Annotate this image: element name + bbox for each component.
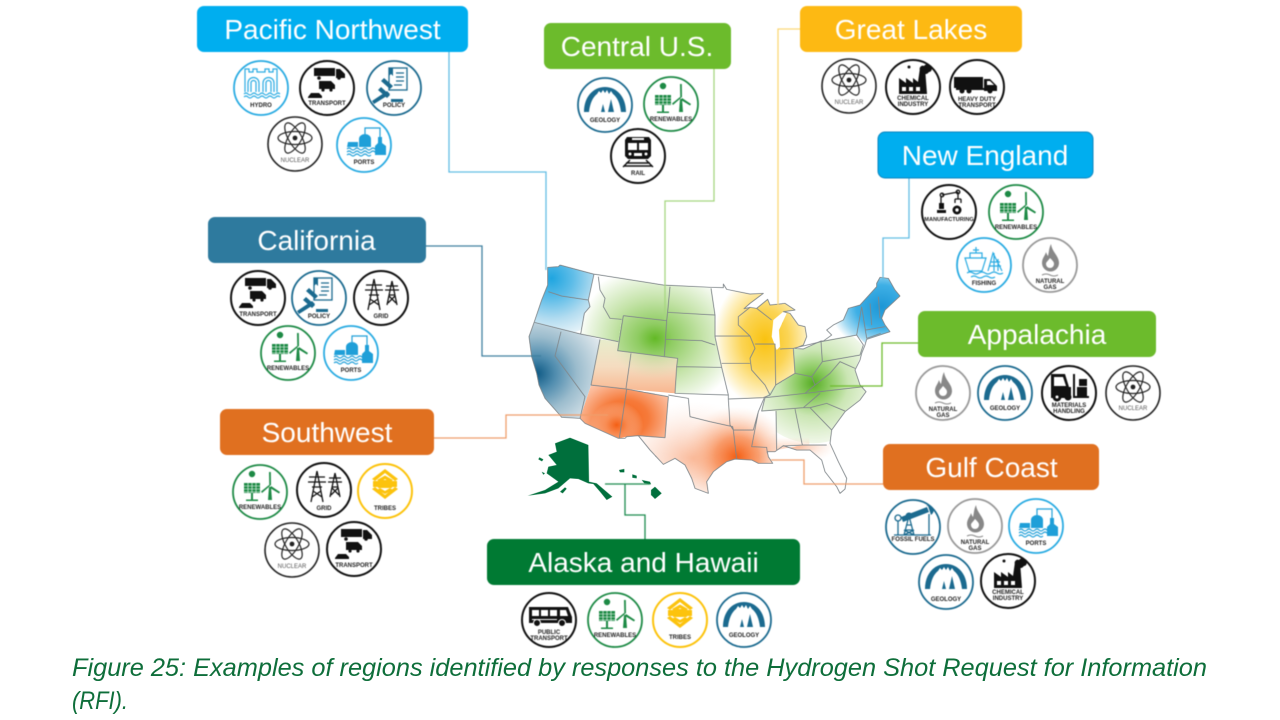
heading bbox=[487, 539, 800, 585]
icon: renewables: RENEWABLES bbox=[267, 366, 309, 372]
panel: Alaska and Hawaii bbox=[487, 484, 800, 647]
heading: Southwest bbox=[262, 417, 393, 448]
icon: chemical industry: INDUSTRY bbox=[898, 102, 928, 108]
icon: nuclear: NUCLEAR bbox=[278, 564, 307, 570]
heading: Great Lakes bbox=[835, 14, 987, 45]
icon: ports: PORTS bbox=[1026, 541, 1046, 547]
connector line bbox=[665, 69, 714, 320]
heading: Gulf Coast bbox=[925, 452, 1058, 483]
icon: policy: POLICY bbox=[308, 314, 330, 320]
heading bbox=[878, 132, 1093, 178]
panel: Gulf Coast bbox=[771, 444, 1099, 609]
heading bbox=[918, 311, 1156, 357]
icon: natural gas bbox=[916, 366, 970, 420]
icon: ports bbox=[324, 326, 378, 380]
icon: heavy duty transport bbox=[950, 60, 1004, 114]
caption: (RFI). bbox=[72, 687, 128, 715]
map region: Utah and Colorado bbox=[592, 340, 678, 394]
icon: renewables: RENEWABLES bbox=[594, 633, 636, 639]
icon: natural gas: GAS bbox=[968, 546, 982, 552]
caption: Figure 25: Examples of regions identified by responses to the Hydrogen Shot Request for Information bbox=[72, 654, 1207, 682]
icon: natural gas: NATURAL bbox=[929, 407, 958, 413]
icon: public transport bbox=[522, 593, 576, 647]
icon: manufacturing bbox=[922, 185, 976, 239]
icon: rail bbox=[611, 129, 665, 183]
icon: transport: TRANSPORT bbox=[239, 312, 277, 318]
icon: geology bbox=[717, 593, 771, 647]
connector line bbox=[449, 52, 546, 270]
icon: chemical industry: INDUSTRY bbox=[993, 596, 1023, 602]
connector line bbox=[830, 343, 918, 386]
icon: tribes: TRIBES bbox=[669, 635, 691, 641]
icon: nuclear: NUCLEAR bbox=[1119, 406, 1148, 412]
icon: grid bbox=[354, 271, 408, 325]
icon: chemical industry: CHEMICAL bbox=[992, 590, 1024, 596]
heading bbox=[208, 217, 426, 263]
icon: tribes: TRIBES bbox=[374, 506, 396, 512]
icon: policy bbox=[292, 271, 346, 325]
connector line bbox=[883, 178, 909, 280]
icon: rail: RAIL bbox=[631, 171, 645, 177]
map: continental United States heat map bbox=[528, 264, 900, 500]
icon: transport bbox=[231, 271, 285, 325]
heading bbox=[220, 409, 434, 455]
connector line bbox=[771, 460, 883, 484]
icon: geology: GEOLOGY bbox=[590, 118, 620, 124]
icon: nuclear: NUCLEAR bbox=[835, 100, 864, 106]
heading: California bbox=[257, 225, 376, 256]
icon: geology bbox=[919, 555, 973, 609]
panel: California bbox=[208, 217, 541, 380]
icon: natural gas bbox=[1023, 238, 1077, 292]
icon: natural gas: GAS bbox=[936, 413, 950, 419]
icon: grid bbox=[297, 463, 351, 517]
icon: geology: GEOLOGY bbox=[990, 406, 1020, 412]
icon: transport bbox=[327, 522, 381, 576]
icon: heavy duty transport: HEAVY DUTY bbox=[958, 97, 996, 103]
icon: geology: GEOLOGY bbox=[931, 597, 961, 603]
icon: fossil fuels bbox=[886, 500, 940, 554]
icon: tribes bbox=[653, 593, 707, 647]
connector line bbox=[778, 29, 800, 307]
icon: renewables bbox=[588, 593, 642, 647]
icon: renewables: RENEWABLES bbox=[650, 117, 692, 123]
icon: ports: PORTS bbox=[354, 160, 374, 166]
map region: Central states bbox=[600, 278, 724, 394]
panel: New England bbox=[878, 132, 1093, 292]
heading bbox=[800, 6, 1022, 52]
map: Hawaii bbox=[619, 469, 662, 499]
icon: transport bbox=[300, 61, 354, 115]
icon: nuclear bbox=[1106, 366, 1160, 420]
icon: public transport: PUBLIC bbox=[538, 630, 561, 636]
icon: fishing bbox=[957, 238, 1011, 292]
icon: ports bbox=[1009, 499, 1063, 553]
icon: grid: GRID bbox=[374, 314, 389, 320]
icon: renewables bbox=[233, 465, 287, 519]
map region: Gulf Coast bbox=[640, 410, 830, 492]
map region: Washington and Oregon bbox=[534, 265, 594, 332]
icon: natural gas: NATURAL bbox=[1036, 279, 1065, 285]
icon: natural gas: GAS bbox=[1043, 285, 1057, 291]
map region: Idaho bbox=[582, 292, 622, 342]
map region: Appalachia bbox=[762, 336, 866, 450]
icon: transport: TRANSPORT bbox=[335, 563, 373, 569]
icon: hydro bbox=[234, 61, 288, 115]
panel: Southwest bbox=[220, 409, 608, 577]
icon: manufacturing: MANUFACTURING bbox=[924, 217, 974, 223]
icon: chemical industry bbox=[886, 60, 940, 114]
icon: renewables bbox=[261, 326, 315, 380]
heading: New England bbox=[902, 140, 1068, 171]
connector line bbox=[605, 484, 650, 539]
icon: tribes bbox=[358, 464, 412, 518]
icon: fishing: FISHING bbox=[972, 281, 996, 287]
icon: fossil fuels: FOSSIL FUELS bbox=[892, 537, 934, 543]
icon: nuclear bbox=[265, 523, 319, 577]
map region: New England bbox=[836, 278, 900, 344]
panel: Appalachia bbox=[830, 311, 1160, 420]
panel: Great Lakes bbox=[778, 6, 1022, 307]
icon: renewables: RENEWABLES bbox=[239, 505, 281, 511]
icon: policy bbox=[367, 61, 421, 115]
Lake Michigan bbox=[772, 312, 787, 350]
icon: natural gas bbox=[948, 499, 1002, 553]
caption bbox=[72, 654, 1207, 715]
icon: public transport: TRANSPORT bbox=[530, 636, 568, 642]
icon: geology bbox=[978, 366, 1032, 420]
icon: ports bbox=[337, 118, 391, 172]
icon: geology bbox=[578, 78, 632, 132]
heading: Pacific Northwest bbox=[224, 14, 441, 45]
map region: Southwest bbox=[580, 385, 668, 438]
icon: nuclear bbox=[822, 59, 876, 113]
heading: Appalachia bbox=[968, 319, 1107, 350]
map region: Great Lakes bbox=[716, 291, 806, 398]
icon: renewables bbox=[989, 185, 1043, 239]
connector line bbox=[426, 246, 541, 356]
heading: Central U.S. bbox=[561, 31, 713, 62]
map: Alaska bbox=[528, 438, 612, 500]
icon: chemical industry: CHEMICAL bbox=[897, 96, 929, 102]
state boundaries bbox=[529, 265, 900, 493]
heading: Alaska and Hawaii bbox=[528, 547, 759, 578]
icon: nuclear: NUCLEAR bbox=[281, 158, 310, 164]
icon: hydro: HYDRO bbox=[250, 103, 272, 109]
heading bbox=[883, 444, 1099, 490]
panel: Central U.S. bbox=[544, 23, 731, 320]
heading bbox=[544, 23, 731, 69]
icon: materials handling: MATERIALS bbox=[1052, 403, 1086, 409]
icon: transport: TRANSPORT bbox=[308, 101, 346, 107]
panel: Pacific Northwest bbox=[197, 6, 546, 270]
connector line bbox=[434, 415, 608, 438]
icon: chemical industry bbox=[981, 554, 1035, 608]
icon: grid: GRID bbox=[316, 506, 332, 512]
icon: policy: POLICY bbox=[383, 103, 405, 109]
icon: renewables: RENEWABLES bbox=[995, 225, 1037, 231]
icon: nuclear bbox=[268, 117, 322, 171]
icon: heavy duty transport: TRANSPORT bbox=[958, 103, 996, 109]
icon: geology: GEOLOGY bbox=[729, 633, 759, 639]
icon: renewables bbox=[644, 77, 698, 131]
heading bbox=[197, 6, 468, 52]
icon: ports: PORTS bbox=[341, 368, 361, 374]
icon: natural gas: NATURAL bbox=[961, 540, 990, 546]
icon: materials handling: HANDLING bbox=[1053, 409, 1085, 415]
icon: materials handling bbox=[1042, 366, 1096, 420]
map region: California and Nevada bbox=[529, 322, 600, 418]
